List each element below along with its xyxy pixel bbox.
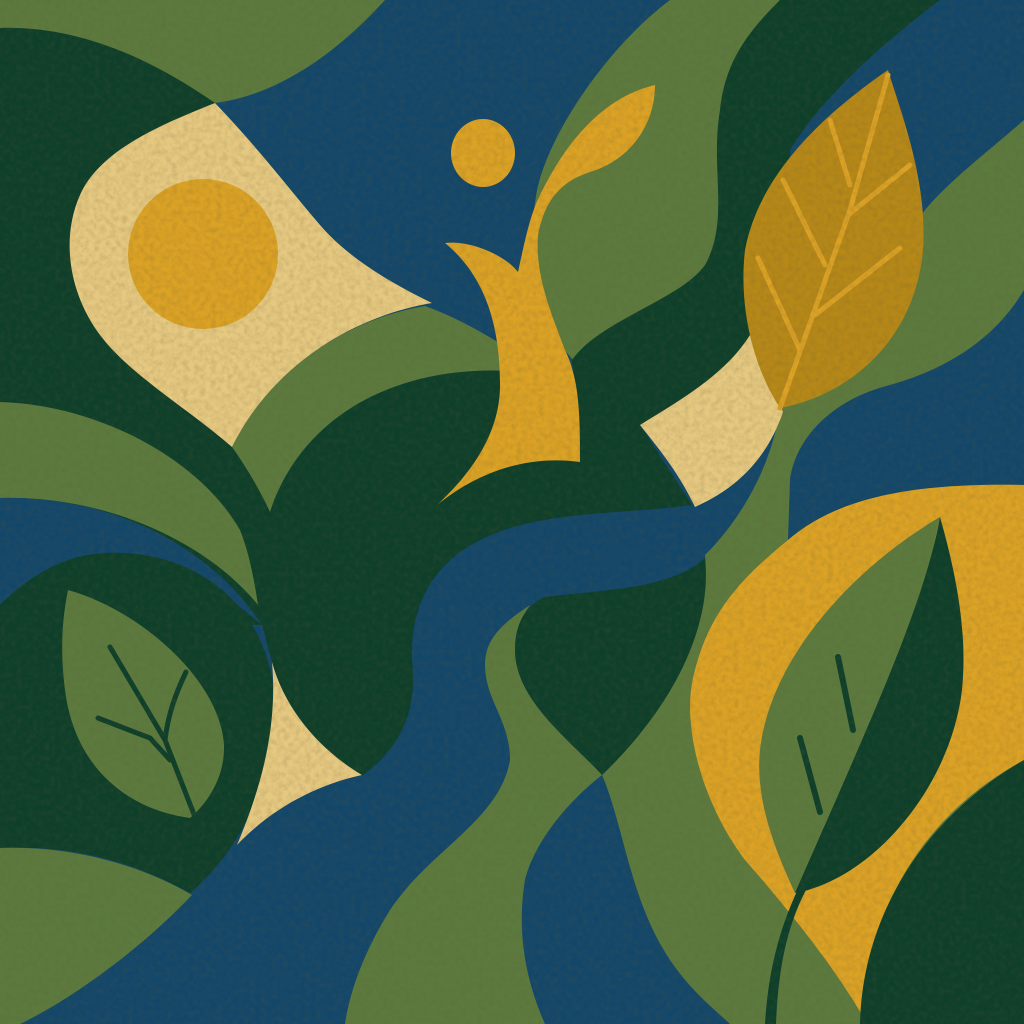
shape: cream sun patch — [70, 103, 432, 447]
shape: dark green ribbon — [572, 0, 940, 462]
shape: central olive arch — [232, 306, 510, 512]
shape: bottom-right dark hill — [860, 760, 1024, 1024]
shape: top-right olive wave — [520, 0, 790, 362]
shape: dark green drop — [515, 558, 706, 775]
icon: sun — [128, 179, 278, 329]
shape: left blue band — [0, 498, 262, 625]
shape: left dark green field — [0, 28, 290, 625]
icon: golden leaf — [743, 70, 924, 408]
shape: bottom-left olive hill — [0, 848, 192, 1024]
shape: central dark green blob — [240, 371, 692, 776]
icon: olive leaf on dark circle — [62, 590, 224, 818]
shape: golden sweep — [690, 485, 1024, 1015]
shape: left olive hill — [0, 402, 258, 605]
icon: seed dot — [451, 119, 515, 187]
shape: right blue pool — [788, 290, 1024, 540]
shape: cream wedge — [237, 662, 362, 845]
shape: top-left olive hill — [0, 0, 385, 103]
shape: right olive band and lower field — [602, 120, 1024, 1024]
shape: dark green circle — [0, 553, 275, 893]
shape: cream ribbon patch — [640, 335, 783, 507]
shape: middle olive stream — [345, 605, 602, 1024]
icon: large two-tone leaf — [759, 517, 963, 1024]
shape: bottom blue pool — [520, 775, 730, 1024]
icon: golden sprout — [437, 85, 655, 505]
